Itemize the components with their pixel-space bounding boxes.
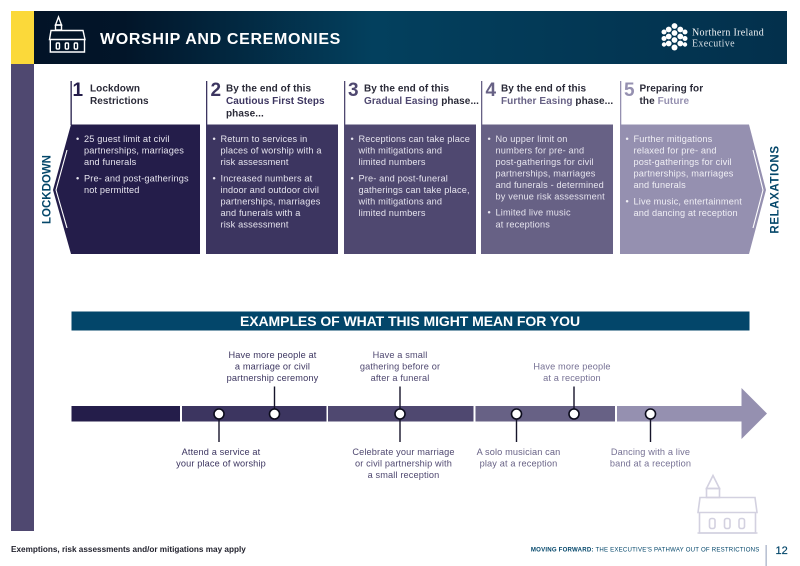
phase 4 text: numbers for pre- and (496, 146, 584, 156)
phase 2 text: • (212, 134, 216, 144)
marker: more people at reception (533, 362, 611, 419)
marker: more people at ceremony: Have more people at (229, 350, 317, 360)
marker: solo musician: A solo musician can (477, 447, 560, 457)
phase 4 text: • (488, 134, 491, 144)
phase 3 text: • (350, 134, 354, 144)
header banner (34, 11, 787, 64)
marker: more people at ceremony (227, 350, 319, 419)
phase 3 text: Pre- and post-funeral (358, 174, 448, 184)
phase 5 column (620, 80, 766, 254)
phase 5 heading: the (640, 96, 658, 107)
phase 3 text: with mitigations and (358, 196, 442, 206)
marker: more people at reception: at a reception (543, 373, 601, 383)
phase 3 number: 3 (348, 80, 359, 101)
phase 5 heading: Future (658, 96, 689, 107)
phase 1 column (53, 80, 200, 254)
phase 1 heading: Lockdown (90, 84, 140, 94)
phase 2 text: and funerals with a (220, 208, 301, 218)
marker: funeral gathering and reception: after a funeral (371, 373, 429, 383)
phase 3 text: • (350, 174, 354, 184)
phase 5 text: Live music, entertainment (634, 196, 742, 206)
phase 4 text: by venue risk assessment (496, 192, 605, 202)
marker: attend a service: Attend a service at (182, 447, 261, 457)
phase 2 heading: By the end of this (226, 84, 312, 94)
marker: dancing: Dancing with a live (611, 447, 690, 457)
phase 2 panel (206, 124, 338, 254)
phase 3 text: gatherings can take place, (358, 185, 470, 195)
phase 4 heading: Further Easing (501, 96, 573, 107)
marker: dancing (610, 409, 691, 468)
phase 4 text: post-gatherings for civil (496, 157, 594, 167)
footer divider (766, 545, 767, 566)
marker: funeral gathering and reception: gathering before or (360, 362, 440, 372)
marker: funeral gathering and reception: or civil partnership with (355, 458, 452, 468)
phase 2 number: 2 (210, 80, 221, 101)
phase 3 heading: Gradual Easing (364, 96, 438, 107)
label: lockdown: LOCKDOWN (42, 155, 54, 224)
phase 2 text: risk assessment (220, 157, 289, 167)
phase 1 text: • (76, 134, 79, 144)
phase 4 text: at receptions (496, 220, 550, 230)
phase 1 text: partnerships, marriages (84, 146, 184, 156)
phase 2 text: Return to services in (220, 134, 307, 144)
phase 5 text: and funerals (634, 180, 686, 190)
phase 5 panel (620, 124, 766, 254)
marker: solo musician: play at a reception (480, 458, 557, 468)
marker: funeral gathering and reception (352, 350, 455, 480)
phase 2 column (206, 80, 338, 254)
phase 2 text: • (212, 174, 216, 184)
examples banner (72, 312, 750, 330)
phase 2 text: partnerships, marriages (220, 196, 321, 206)
yellow corner block (11, 11, 34, 64)
phase 4 text: • (488, 208, 491, 218)
phase 5 text: relaxed for pre- and (634, 146, 717, 156)
marker: funeral gathering and reception: a small reception (368, 470, 439, 480)
phase 2 text: Increased numbers at (220, 174, 313, 184)
marker: more people at ceremony: partnership ceremony (227, 373, 319, 383)
phase 3 panel (344, 124, 476, 254)
phase 3 text: with mitigations and (358, 146, 442, 156)
phase 5 text: post-gatherings for civil (634, 157, 732, 167)
phase 5 heading: Preparing for (640, 84, 703, 94)
page number: 12 (776, 545, 788, 557)
phase 4 text: No upper limit on (496, 134, 568, 144)
phase 1 text: • (76, 174, 79, 184)
phase 1 text: not permitted (84, 185, 140, 195)
title: WORSHIP AND CEREMONIES (100, 31, 341, 48)
logo: Northern Ireland Executive: Northern Ireland (692, 28, 764, 38)
phase 4 heading: phase... (573, 96, 613, 107)
phase 4 text: and funerals - determined (496, 180, 604, 190)
footer caption: MOVING FORWARD: THE EXECUTIVE'S PATHWAY OUT OF RESTRICTIONS (531, 546, 760, 554)
phase 3 column (344, 80, 479, 254)
marker: attend a service (176, 409, 266, 468)
phase 3 heading: By the end of this (364, 84, 450, 94)
phase 4 text: Limited live music (496, 208, 571, 218)
phase 1 text: and funerals (84, 157, 137, 167)
examples banner: EXAMPLES OF WHAT THIS MIGHT MEAN FOR YOU (240, 313, 580, 329)
marker: funeral gathering and reception: Celebrate your marriage (352, 447, 455, 457)
phase 1 text: Pre- and post-gatherings (84, 174, 189, 184)
phase 1 heading: Restrictions (90, 96, 149, 107)
phase 3 text: limited numbers (358, 157, 426, 167)
timeline arrow (72, 388, 767, 439)
marker: attend a service: your place of worship (176, 458, 266, 468)
phase 5 text: partnerships, marriages (634, 168, 734, 178)
phase 1 text: 25 guest limit at civil (84, 134, 170, 144)
marker: funeral gathering and reception: Have a small (373, 350, 427, 360)
phase 3 text: Receptions can take place (358, 134, 470, 144)
phase 4 panel (481, 124, 613, 254)
phase 5 text: Further mitigations (634, 134, 713, 144)
phase 1 number: 1 (72, 80, 84, 101)
logo: Northern Ireland Executive (662, 23, 764, 50)
marker: solo musician (477, 409, 560, 468)
marker: more people at reception: Have more people (533, 362, 611, 372)
footnote: Exemptions, risk assessments and/or mitigations may apply (11, 545, 246, 554)
phase 4 heading: By the end of this (501, 84, 587, 94)
marker: dancing: band at a reception (610, 458, 691, 468)
phase 4 number: 4 (486, 80, 496, 101)
phase 5 text: • (626, 134, 629, 144)
phase 3 text: limited numbers (358, 208, 426, 218)
icon: church (50, 17, 85, 52)
icon: faded church (698, 476, 758, 533)
phase 2 heading: phase... (226, 108, 264, 120)
left sidebar (11, 64, 34, 531)
phase 4 text: partnerships, marriages (496, 168, 596, 178)
phase 5 number: 5 (624, 80, 635, 101)
phase 4 column (481, 80, 613, 254)
phase 3 heading: phase... (438, 96, 479, 107)
logo: Northern Ireland Executive: Executive (692, 38, 735, 50)
phase 2 text: indoor and outdoor civil (220, 185, 319, 195)
phase 5 text: • (626, 196, 629, 206)
marker: more people at ceremony: a marriage or civil (235, 362, 310, 372)
phase 2 text: risk assessment (220, 220, 289, 230)
phase 2 text: places of worship with a (220, 146, 322, 156)
phase 1 panel (53, 124, 200, 254)
label: relaxations: RELAXATIONS (770, 145, 782, 234)
phase 2 heading: Cautious First Steps (226, 96, 325, 107)
phase 5 text: and dancing at reception (634, 208, 738, 218)
